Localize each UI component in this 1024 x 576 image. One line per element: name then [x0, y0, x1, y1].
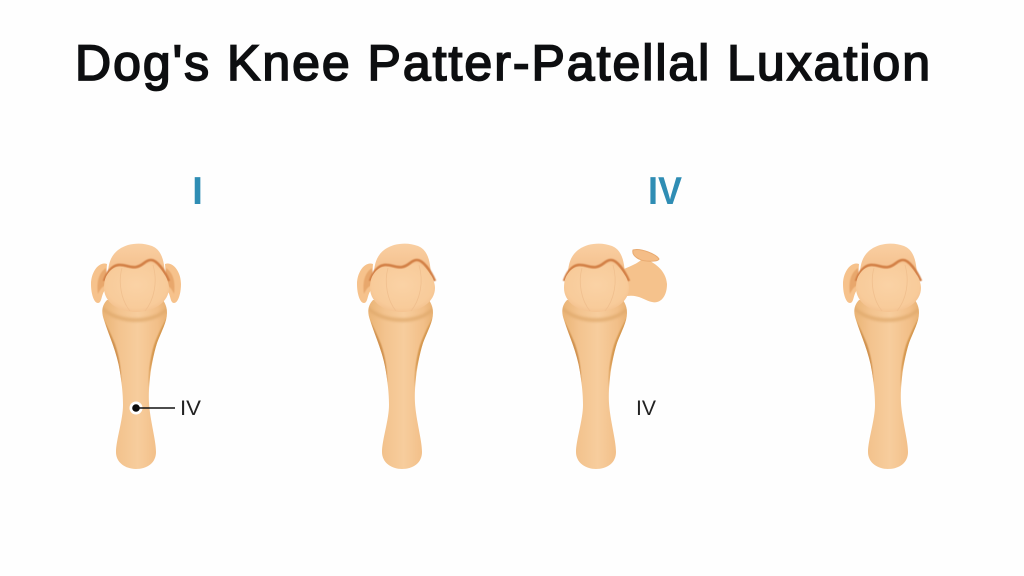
bone illustration 3: grade IV with displaced patella: [562, 244, 667, 469]
callout: IV marker on first bone: [130, 397, 201, 420]
bone illustration 1: grade I with patella on both sides: [91, 244, 181, 469]
grade heading: I: I: [192, 170, 203, 213]
grade heading: IV: IV: [648, 170, 682, 213]
title: Dog's Knee Patter-Patellal Luxation: [75, 35, 930, 91]
bone illustration 2: [357, 244, 435, 469]
callout: IV marker on first bone: IV: [180, 397, 201, 420]
label: IV beside third bone: IV: [636, 397, 656, 420]
bone illustration 4: [843, 244, 921, 469]
